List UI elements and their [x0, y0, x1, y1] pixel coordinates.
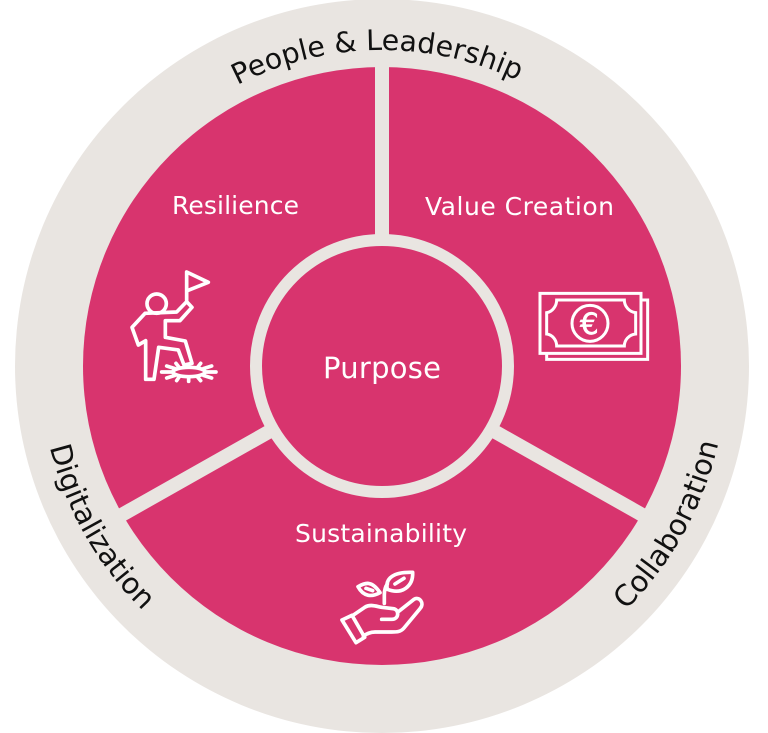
centre circle: purpose	[256, 240, 508, 492]
heading: Sustainability: Sustainability	[295, 519, 467, 548]
label: Digitalization: Digitalization	[50, 444, 151, 609]
heading: Value Creation: Value Creation	[425, 192, 614, 221]
icon: person planting flag on gear	[132, 272, 216, 381]
icon: euro banknotes	[540, 293, 648, 359]
heading: Purpose: Purpose	[323, 351, 441, 385]
label: People & Leadership: People & Leadership	[230, 29, 521, 84]
panel: pink wheel segments	[83, 67, 681, 665]
euro sign: €	[580, 307, 599, 341]
heading: Resilience: Resilience	[172, 191, 299, 220]
segment dividers	[118, 60, 646, 517]
icon: hand holding seedling	[342, 572, 422, 643]
label: Collaboration: Collaboration	[615, 442, 718, 606]
